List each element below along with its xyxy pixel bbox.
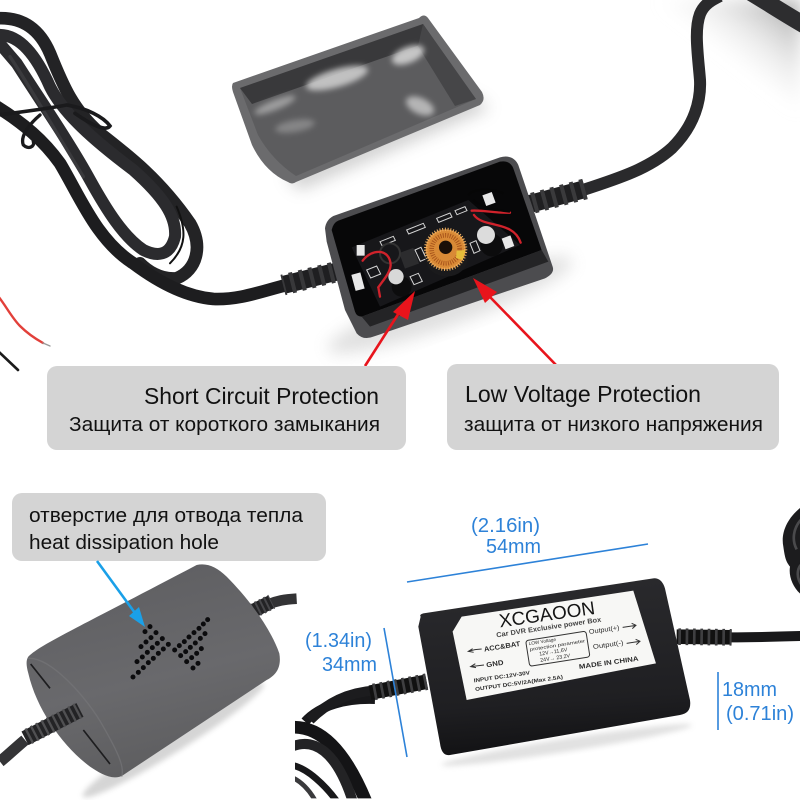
protection parameter box: [526, 631, 590, 666]
gray device with heat dissipation holes: [0, 564, 297, 800]
protection parameter box: 24V→ 23.2V: [540, 653, 571, 664]
strain relief on end cap: [25, 710, 80, 738]
dimension: width 54mm: (2.16in): [471, 515, 540, 537]
protective lid: [232, 16, 490, 190]
box cables: [310, 636, 800, 720]
copper toroid coil: [425, 229, 468, 277]
input and output arrows: [468, 623, 640, 668]
callout english text: heat dissipation hole: [29, 532, 219, 554]
red arrow: short circuit protection: [365, 291, 415, 366]
red wire: [0, 296, 43, 343]
cable running to top right: [583, 0, 800, 190]
product photo: coiled cable: [0, 18, 287, 299]
bare wire ends: [0, 296, 50, 370]
black wire: [0, 351, 18, 370]
vent hole dots: [133, 620, 208, 677]
output labels: Output(+): [589, 625, 620, 636]
dimension: depth 18mm: (0.71in): [726, 703, 794, 725]
lid highlights: [253, 41, 437, 135]
blue arrow to heat holes: [97, 561, 145, 627]
open power box with circuit board: [283, 157, 585, 368]
callout: low voltage protection: [447, 364, 779, 450]
callout: heat dissipation hole: [12, 493, 326, 561]
silk-screen marks: [367, 207, 480, 285]
front wall: [362, 250, 548, 327]
lid floor: [240, 24, 476, 176]
white label: GND: [486, 660, 504, 669]
white label: OUTPUT DC:5V/2A(Max 2.5A): [475, 675, 564, 693]
device cables: [0, 599, 297, 762]
callout heading: Short Circuit Protection: [144, 383, 379, 409]
shadow behind top-right cables: [660, 0, 800, 110]
callout heading: Low Voltage Protection: [465, 381, 701, 407]
interior: [332, 161, 542, 317]
outer shell: [325, 157, 553, 338]
dimension: width 54mm: [407, 515, 648, 582]
zip tie: [0, 105, 110, 147]
dimension: height 34mm: 34mm: [322, 654, 377, 676]
pads: [351, 192, 514, 291]
lid inner walls: [240, 24, 434, 104]
specs: INPUT DC:12V-30V: [473, 670, 531, 684]
chip: [399, 248, 419, 269]
callout russian text: Защита от короткого замыкания: [69, 414, 380, 436]
callout russian text: защита от низкого напряжения: [464, 414, 763, 436]
dimension: height 34mm: (1.34in): [305, 630, 372, 652]
dimension: depth 18mm: 18mm: [722, 679, 777, 701]
coiled cable at lower right photo: [290, 699, 375, 800]
protection parameter box: 12V→11.6V: [539, 647, 568, 658]
circuit board: [351, 192, 520, 307]
white label: Output(-): [593, 640, 624, 651]
brand logo: XCGAOON: [498, 597, 596, 631]
protection parameter box: protection parameter: [529, 638, 586, 652]
red arrow: low voltage protection: [473, 278, 557, 366]
white label: MADE IN CHINA: [579, 656, 639, 671]
input labels: ACC&BAT: [484, 641, 522, 654]
black power box with label: [310, 578, 800, 771]
dimension: depth 18mm: [718, 672, 794, 730]
callout: short circuit protection: [47, 366, 406, 450]
dimension: width 54mm: 54mm: [486, 536, 541, 558]
red jumper wires: [363, 211, 521, 297]
strain reliefs: [283, 189, 585, 285]
white label: [453, 591, 656, 700]
coil strands: [0, 18, 287, 299]
box body: [418, 578, 690, 755]
device body: [27, 564, 280, 777]
end cap seam: [31, 664, 110, 764]
capacitors: [480, 234, 503, 256]
callout russian text: отверстие для отвода тепла: [29, 505, 304, 527]
protection parameter box: LOW Voltage: [528, 637, 557, 646]
coil at top right of lower photo: [783, 507, 800, 595]
dimension: height 34mm: [305, 628, 407, 757]
subtitle: Car DVR Exclusive power Box: [496, 617, 602, 639]
